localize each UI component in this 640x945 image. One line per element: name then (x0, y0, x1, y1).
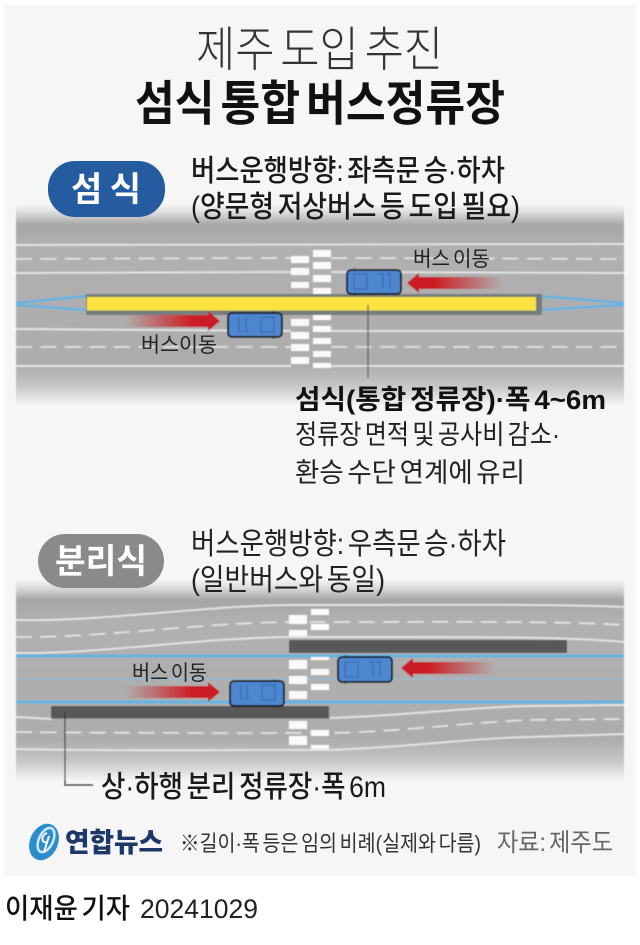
bus stop: lower bar (51, 706, 329, 718)
icon: globe (23, 819, 65, 865)
arrow: bus direction right (125, 682, 220, 702)
icon: bus bottom (230, 679, 284, 708)
footnote: ※길이·폭 등은 임의 비례(실제와 다름) (180, 831, 481, 856)
text: island description: 섬식(통합 정류장)·폭 4~6m (295, 385, 606, 415)
blue lane lines (16, 656, 624, 702)
title: 섬식 통합 버스정류장 (135, 78, 505, 131)
arrow: bus direction right (125, 311, 220, 331)
text: island direction: 버스운행방향: 좌측문 승·하차 (191, 155, 505, 188)
icon: bus top (347, 268, 401, 296)
wordmark: 연합뉴스 (65, 828, 163, 858)
text: separated description: 상·하행 분리 정류장·폭 6m (101, 771, 386, 804)
icon: bus bottom (228, 311, 282, 339)
bus stop: upper bar (289, 640, 567, 653)
label: bus move: 버스 이동 (132, 662, 207, 685)
source: 자료: 제주도 (497, 829, 613, 857)
label: bus move top: 버스 이동 (413, 248, 490, 271)
title: 제주 도입 추진 (196, 24, 443, 77)
crosswalk (291, 250, 331, 368)
text: island description: 정류장 면적 및 공사비 감소· (295, 420, 560, 450)
panel: separated type road (16, 580, 624, 785)
lane markings (16, 244, 624, 366)
road surface (16, 580, 624, 780)
leader line (367, 305, 369, 378)
byline: 20241029 (140, 894, 258, 924)
byline: 이재윤 기자 (5, 893, 130, 924)
badge: island (48, 161, 165, 217)
leader line (65, 712, 93, 785)
badge: island: 섬 식 (71, 171, 141, 209)
text: island description (295, 385, 606, 488)
arrow: bus direction left (407, 273, 503, 293)
text: separated direction: (일반버스와 동일) (191, 564, 385, 597)
text: island direction: (양문형 저상버스 등 도입 필요) (191, 191, 520, 224)
footer logo (23, 819, 163, 865)
icon: bus top (338, 655, 392, 684)
badge: separated: 분리식 (55, 543, 147, 581)
bus stop: yellow island (86, 294, 542, 315)
road surface (16, 205, 624, 405)
title (135, 24, 505, 131)
crosswalk (289, 609, 329, 749)
label: bus move bottom: 버스이동 (141, 334, 217, 357)
badge: separated (38, 534, 164, 588)
text: separated direction: 버스운행방향: 우측문 승·하차 (191, 528, 506, 561)
lane markings (16, 605, 624, 750)
text: separated direction (191, 528, 506, 597)
arrow: bus direction left (401, 658, 495, 678)
text: island description: 환승 수단 연계에 유리 (295, 458, 525, 488)
blue lane lines (16, 296, 624, 310)
panel: island type road (16, 205, 624, 405)
byline (5, 893, 258, 924)
text: island direction (191, 155, 520, 224)
